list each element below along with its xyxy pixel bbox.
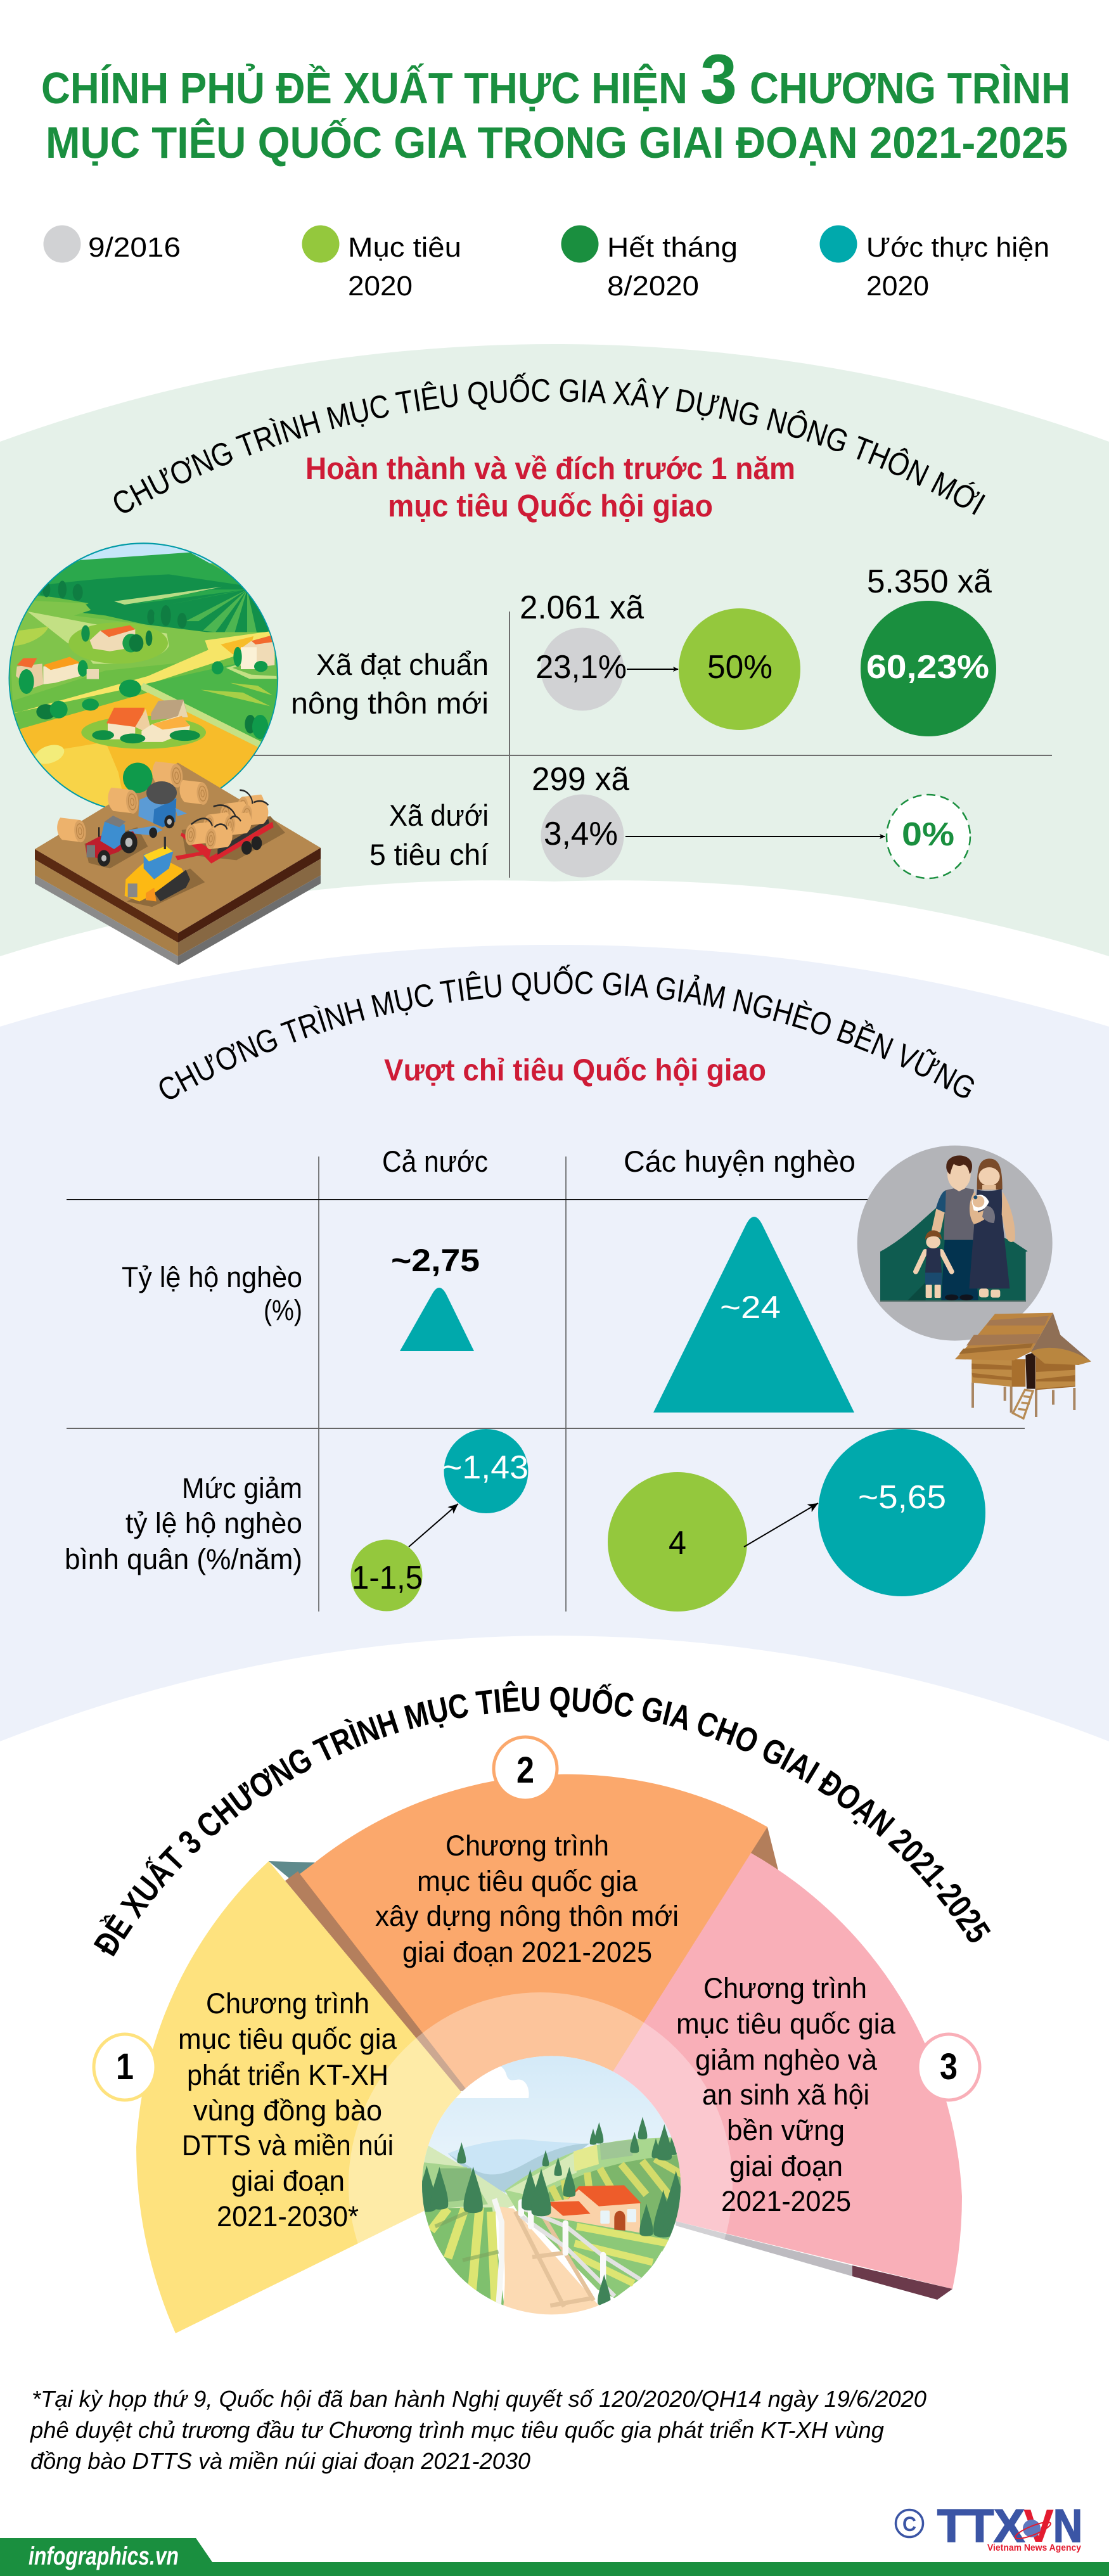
- striped field right bottom: [522, 2212, 672, 2298]
- inner ring: [349, 1992, 733, 2376]
- illustration: family: [857, 1146, 1053, 1341]
- footnote: phê duyệt chủ trương đầu tư Chương trình mục tiêu quốc gia phát triển KT-XH vùng: [30, 2417, 884, 2443]
- row label: tỷ lệ hộ nghèo: (%): [264, 1294, 302, 1326]
- distant trees: [42, 580, 187, 628]
- row label: xã dưới 5 tiêu chí: [369, 798, 489, 871]
- logo: TTXVN: TTX: [937, 2501, 1025, 2552]
- title: MỤC TIÊU QUỐC GIA TRONG GIAI ĐOẠN 2021-2025: [46, 117, 1068, 167]
- fold strip pink: [676, 2221, 952, 2300]
- illustration: countryside circle: [9, 542, 279, 807]
- bubble: 299 xã 3,4%: 3,4%: [544, 816, 618, 852]
- column headings: [382, 1144, 856, 1178]
- houses: [16, 625, 274, 743]
- fold strip: [285, 1871, 468, 2091]
- text: program 1: DTTS và miền núi: [182, 2129, 394, 2162]
- fan sector 1: yellow: [136, 1861, 551, 2333]
- text: program 1: phát triển KT-XH: [187, 2059, 388, 2091]
- title: 3: [700, 41, 737, 119]
- text: program 2: mục tiêu quốc gia: [417, 1865, 638, 1897]
- subtitle red: mục tiêu Quốc hội giao: [388, 489, 713, 523]
- curved heading: giảm nghèo: CHƯƠNG TRÌNH MỤC TIÊU QUỐC GIA GIẢM NGHÈO BỀN VỮNG: [160, 964, 974, 1099]
- text: program 3: an sinh xã hội: [702, 2079, 869, 2111]
- row label: xã dưới 5 tiêu chí: 5 tiêu chí: [369, 838, 489, 871]
- text: program 1: giai đoạn: [231, 2165, 345, 2197]
- row label: tỷ lệ hộ nghèo: Tỷ lệ hộ nghèo: [122, 1261, 302, 1293]
- text: program 1: [178, 1987, 397, 2233]
- bubble: 1-1,5: [351, 1540, 423, 1611]
- bushes: [36, 661, 268, 739]
- bubble: 4: [608, 1472, 747, 1612]
- text: program 2: xây dựng nông thôn mới: [375, 1900, 679, 1932]
- bubble: ~1,43: ~1,43: [442, 1449, 529, 1486]
- text: program 3: 2021-2025: [721, 2185, 851, 2217]
- arrow: [409, 1504, 458, 1547]
- logo: TTXVN: N: [1053, 2501, 1082, 2552]
- bubble: 1-1,5: 1-1,5: [352, 1560, 423, 1596]
- text: program 2: Chương trình: [446, 1829, 609, 1862]
- number badge 1: [94, 2034, 156, 2100]
- triangle: ~2,75: [391, 1243, 480, 1351]
- man: [932, 1155, 978, 1300]
- panel: chương trình nông thôn mới: [0, 344, 1109, 965]
- title: [41, 41, 1070, 167]
- logo: TTXVN: Vietnam News Agency: [987, 2542, 1082, 2553]
- text: program 3: Chương trình: [703, 1972, 867, 2004]
- row label: mức giảm: tỷ lệ hộ nghèo: [125, 1507, 302, 1539]
- legend: 2020: [348, 271, 413, 302]
- bubble: 4: 4: [669, 1525, 686, 1561]
- text: program 1: vùng đồng bào: [193, 2094, 382, 2127]
- text: program 3: bền vững: [727, 2114, 845, 2146]
- bubble: 50%: 50%: [707, 649, 772, 686]
- bubble: 2.061 xã 23,1%: 2.061 xã: [520, 589, 644, 626]
- bubble: 299 xã 3,4%: [532, 761, 629, 877]
- fold tips: [269, 1827, 778, 1880]
- panel: đề xuất 3 chương trình: [93, 1681, 991, 2333]
- right fence: [521, 2207, 640, 2296]
- panel: chương trình giảm nghèo: [0, 945, 1109, 1741]
- logo: TTXVN: [896, 2501, 1082, 2553]
- icon: hay trailer: [176, 790, 274, 864]
- number badge 1: 1: [116, 2046, 134, 2087]
- text: program 3: [676, 1972, 896, 2217]
- bubble: 2.061 xã 23,1%: 23,1%: [535, 649, 627, 686]
- bubble: 5.350 xã 60,23%: 5.350 xã: [867, 563, 992, 600]
- column headings: Cả nước: [382, 1144, 488, 1178]
- house: [543, 2188, 640, 2233]
- footer bar: infographics.vn: [29, 2542, 179, 2570]
- left fence: [494, 2199, 502, 2305]
- legend: 2020: [866, 271, 929, 302]
- woman: [969, 1158, 1015, 1298]
- subtitle red: Vượt chỉ tiêu Quốc hội giao: [384, 1054, 766, 1087]
- bubble: 2.061 xã 23,1%: [520, 589, 644, 711]
- bubble: ~1,43: [442, 1429, 529, 1513]
- bubble: ~5,65: ~5,65: [858, 1479, 946, 1516]
- row label: xã đạt chuẩn: Xã đạt chuẩn: [316, 648, 489, 681]
- number badge 2: 2: [516, 1750, 534, 1791]
- footer bar: [0, 2538, 1109, 2576]
- legend: 8/2020: [607, 271, 699, 302]
- text: program 1: Chương trình: [206, 1987, 369, 2020]
- striped fields right: [545, 2155, 686, 2237]
- illustration: farm block with tractors: [35, 761, 321, 965]
- illustration: countryside scene: [422, 2056, 681, 2314]
- icon: red tractor: [86, 816, 138, 866]
- fan sector 2: orange: [288, 1774, 767, 2155]
- triangle: ~24: [653, 1217, 854, 1413]
- text: program 1: 2021-2030*: [217, 2200, 359, 2233]
- bubble: 5.350 xã 60,23%: [861, 563, 996, 736]
- row label: mức giảm: Mức giảm: [182, 1472, 302, 1504]
- bubble: 0%: [887, 795, 970, 878]
- row label: mức giảm: [65, 1472, 302, 1575]
- legend: Ước thực hiện: [866, 232, 1049, 263]
- footnote: *Tại kỳ họp thứ 9, Quốc hội đã ban hành Nghị quyết số 120/2020/QH14 ngày 19/6/2020: [32, 2386, 926, 2412]
- trees: [417, 2117, 688, 2306]
- number badge 2: [494, 1737, 557, 1800]
- row label: tỷ lệ hộ nghèo: [122, 1261, 302, 1326]
- title: CHƯƠNG TRÌNH: [750, 63, 1070, 113]
- legend: [43, 226, 1049, 302]
- footnote: [30, 2386, 926, 2474]
- legend: Mục tiêu: [348, 232, 461, 263]
- icon: baler: [129, 781, 187, 838]
- footnote: đồng bào DTTS và miền núi giai đoạn 2021-2030: [30, 2448, 530, 2474]
- curved heading: nông thôn mới: CHƯƠNG TRÌNH MỤC TIÊU QUỐC GIA XÂY DỰNG NÔNG THÔN MỚI: [114, 373, 985, 515]
- arrow: [625, 836, 885, 837]
- legend: 9/2016: [88, 232, 181, 263]
- arrow: [744, 1503, 818, 1547]
- column headings: Các huyện nghèo: [624, 1144, 856, 1178]
- row label: mức giảm: bình quân (%/năm): [65, 1543, 302, 1575]
- triangle: ~2,75: ~2,75: [391, 1243, 480, 1278]
- number badge 3: [918, 2034, 980, 2100]
- text: program 2: giai đoạn 2021-2025: [402, 1936, 652, 1968]
- row label: xã đạt chuẩn: [291, 648, 489, 720]
- row label: xã đạt chuẩn: nông thôn mới: [291, 686, 489, 720]
- logo: TTXVN: V: [1023, 2501, 1054, 2552]
- bubble: 0%: 0%: [902, 816, 954, 853]
- text: program 3: giảm nghèo và: [695, 2044, 878, 2076]
- row label: xã dưới 5 tiêu chí: Xã dưới: [389, 798, 489, 832]
- bubble: 5.350 xã 60,23%: 60,23%: [866, 649, 989, 686]
- bubble: 299 xã 3,4%: 299 xã: [532, 761, 629, 798]
- arrow: [627, 669, 678, 670]
- road: [496, 2207, 600, 2319]
- title: CHÍNH PHỦ ĐỀ XUẤT THỰC HIỆN: [41, 63, 688, 113]
- bubble: ~5,65: [818, 1429, 985, 1596]
- bubble: 50%: [679, 608, 800, 730]
- illustration: stilt hut: [955, 1313, 1091, 1418]
- number badge 3: 3: [940, 2046, 958, 2087]
- child: [916, 1230, 952, 1298]
- subtitle red: Hoàn thành và về đích trước 1 năm: [305, 452, 795, 486]
- subtitle red: [305, 452, 795, 523]
- text: program 3: mục tiêu quốc gia: [676, 2008, 896, 2040]
- fan sector 3: pink: [558, 1853, 962, 2289]
- text: program 1: mục tiêu quốc gia: [178, 2023, 397, 2055]
- logo: TTXVN: C: [902, 2513, 916, 2535]
- triangle: ~24: ~24: [720, 1290, 781, 1325]
- curved heading: đề xuất: ĐỀ XUẤT 3 CHƯƠNG TRÌNH MỤC TIÊU QUỐC GIA CHO GIAI ĐOẠN 2021-2025: [94, 1681, 991, 1957]
- icon: yellow crawler tractor: [125, 837, 190, 901]
- text: program 2: [375, 1829, 679, 1968]
- legend: Hết tháng: [607, 232, 738, 263]
- text: program 3: giai đoạn: [729, 2150, 843, 2182]
- striped field left: [424, 2207, 504, 2305]
